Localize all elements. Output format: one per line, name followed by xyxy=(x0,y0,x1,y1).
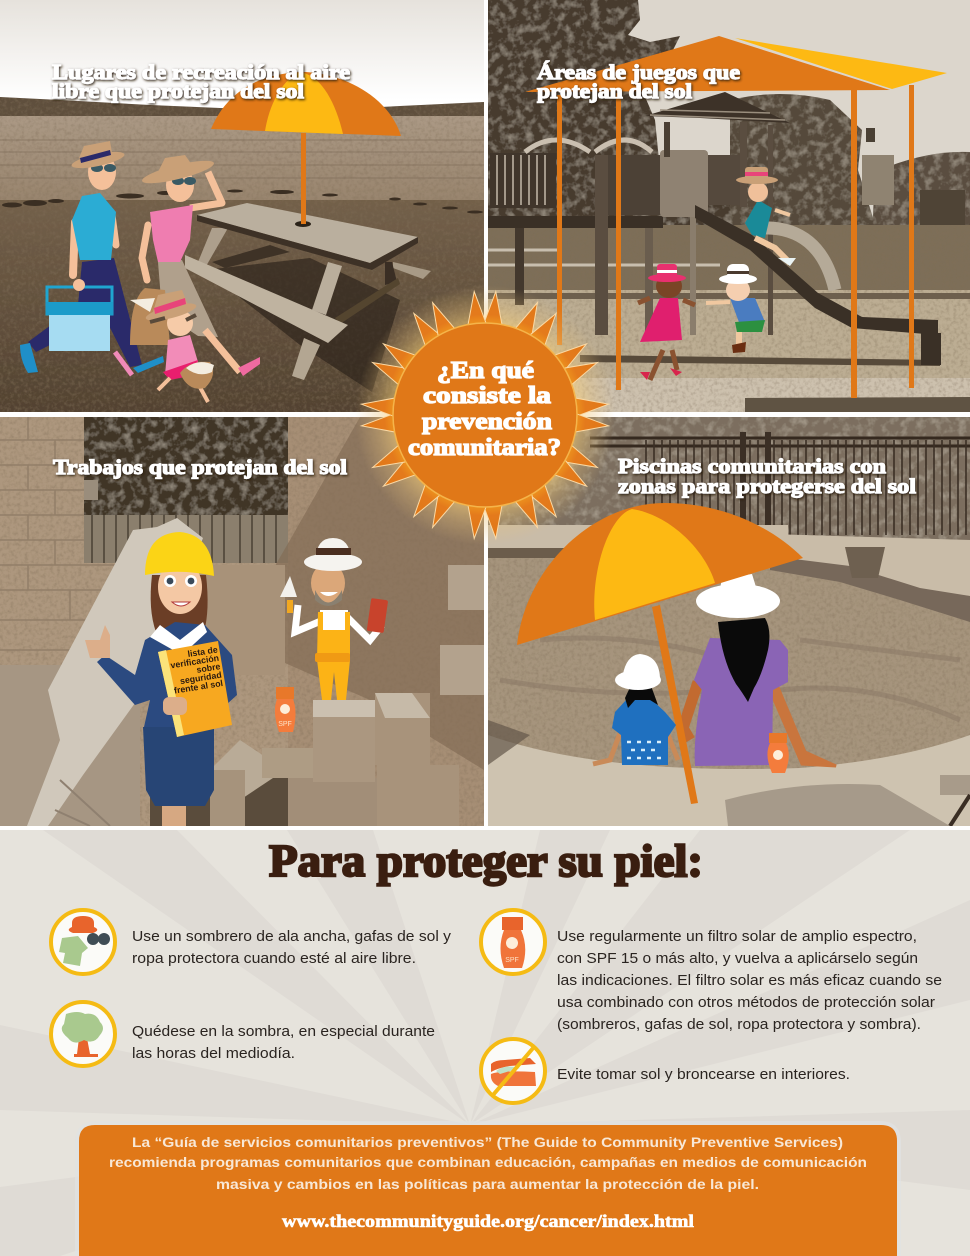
woman in hard hat with checklist: sobre xyxy=(196,661,221,675)
sunscreen bottle xyxy=(275,687,296,732)
callout text: La “Guía de servicios comunitarios preventivos” (The Guide to Community Preventive Services) xyxy=(132,1135,843,1150)
panel: workplace xyxy=(0,417,484,826)
sunscreen bottle xyxy=(767,733,789,773)
callout text: masiva y cambios en las políticas para aumentar la protección de la piel. xyxy=(216,1177,759,1192)
tip text: Quédese en la sombra, en especial durante xyxy=(132,1023,435,1040)
tip text: (sombreros, gafas de sol, ropa protectora y sombra). xyxy=(557,1016,921,1033)
tip text: Evite tomar sol y broncearse en interiores. xyxy=(557,1066,850,1083)
tip: shade xyxy=(51,1002,435,1066)
heading: pools: zonas para protegerse del sol xyxy=(618,474,916,498)
woman in hard hat with checklist: verificación xyxy=(170,653,220,670)
icon: hat, glasses, shirt xyxy=(51,910,115,974)
heading: recreation: libre que protejan del sol xyxy=(52,79,304,103)
woman in hard hat with checklist: lista de xyxy=(187,644,218,659)
heading: pools xyxy=(618,454,916,498)
umbrella over pool xyxy=(517,503,803,804)
panel: outdoor recreation xyxy=(0,0,484,412)
woman in hard hat with checklist: seguridad xyxy=(179,670,222,686)
tip text xyxy=(132,1023,435,1062)
tip text: las horas del mediodía. xyxy=(132,1045,295,1062)
photo background: lake and grass xyxy=(0,0,484,412)
woman with basket xyxy=(115,155,260,376)
icon: tree xyxy=(51,1002,115,1066)
shade canopy xyxy=(525,36,947,398)
callout: community guide recommendation xyxy=(75,1121,901,1256)
child on slide xyxy=(736,167,796,266)
tip text: Use regularmente un filtro solar de amplio espectro, xyxy=(557,928,917,945)
boy in blue shirt xyxy=(706,264,765,353)
tip text: usa combinado con otros métodos de protección solar xyxy=(557,994,935,1011)
heading: playground: Áreas de juegos que xyxy=(537,60,740,84)
sun question text: consiste la xyxy=(423,383,551,409)
woman in hard hat with checklist: frente al sol xyxy=(173,678,224,696)
tip text: las indicaciones. El filtro solar es más eficaz cuando se xyxy=(557,972,942,989)
website link: www.thecommunityguide.org/cancer/index.html xyxy=(282,1211,694,1231)
heading: playground: protejan del sol xyxy=(537,79,692,103)
panel: swimming pools xyxy=(488,417,970,826)
man with cooler xyxy=(20,141,164,373)
girl in pink dress xyxy=(638,264,695,380)
heading: workplaces: Trabajos que protejan del sol xyxy=(53,455,347,479)
heading: recreation xyxy=(52,60,350,103)
sunburst background xyxy=(0,830,970,1256)
umbrella xyxy=(211,72,401,224)
sunscreen bottle: SPF xyxy=(278,721,292,728)
central sun badge xyxy=(355,285,615,545)
photo background: construction site xyxy=(0,417,484,826)
title: Para proteger su piel: xyxy=(269,836,703,886)
tip: sunscreen xyxy=(481,910,942,1033)
icon: sunscreen bottle xyxy=(481,910,545,974)
heading: recreation: Lugares de recreación al aire xyxy=(52,60,350,84)
heading: pools: Piscinas comunitarias con xyxy=(618,454,886,478)
play structure xyxy=(488,92,941,365)
sun rays xyxy=(361,291,609,539)
child in blue swimsuit xyxy=(593,654,678,765)
tip text: con SPF 15 o más alto, y vuelva a aplicárselo según xyxy=(557,950,918,967)
tip text: Use un sombrero de ala ancha, gafas de sol y xyxy=(132,928,452,945)
tip text xyxy=(132,928,452,967)
tip: indoor tanning xyxy=(481,1039,850,1103)
icon: crossed-out tanning bed xyxy=(481,1039,545,1103)
tip text xyxy=(557,928,942,1033)
stacked bricks xyxy=(210,693,459,826)
picnic table xyxy=(185,203,431,380)
lumber pile xyxy=(27,518,285,826)
sun question text: comunitaria? xyxy=(408,435,561,461)
girl with basket xyxy=(144,290,214,402)
heading: playground xyxy=(537,60,740,103)
icon: sunscreen bottle: SPF xyxy=(505,957,519,964)
woman in purple dress xyxy=(683,574,836,766)
tip text: ropa protectora cuando esté al aire libre. xyxy=(132,950,416,967)
photo background: pool and fence xyxy=(488,417,970,826)
tip: hat and clothing xyxy=(51,910,452,974)
photo background: park xyxy=(488,0,970,412)
worker with trowel xyxy=(280,538,388,700)
sun question text xyxy=(408,358,561,461)
woman in hard hat with checklist xyxy=(85,532,237,826)
callout text xyxy=(109,1135,867,1192)
callout text: recomienda programas comunitarios que combinan educación, campañas en medios de comunicación xyxy=(109,1155,867,1170)
panel: playground xyxy=(488,0,970,412)
sun question text: ¿En qué xyxy=(437,358,534,384)
section: skin protection tips xyxy=(0,830,970,1256)
sun question text: prevención xyxy=(422,409,552,435)
